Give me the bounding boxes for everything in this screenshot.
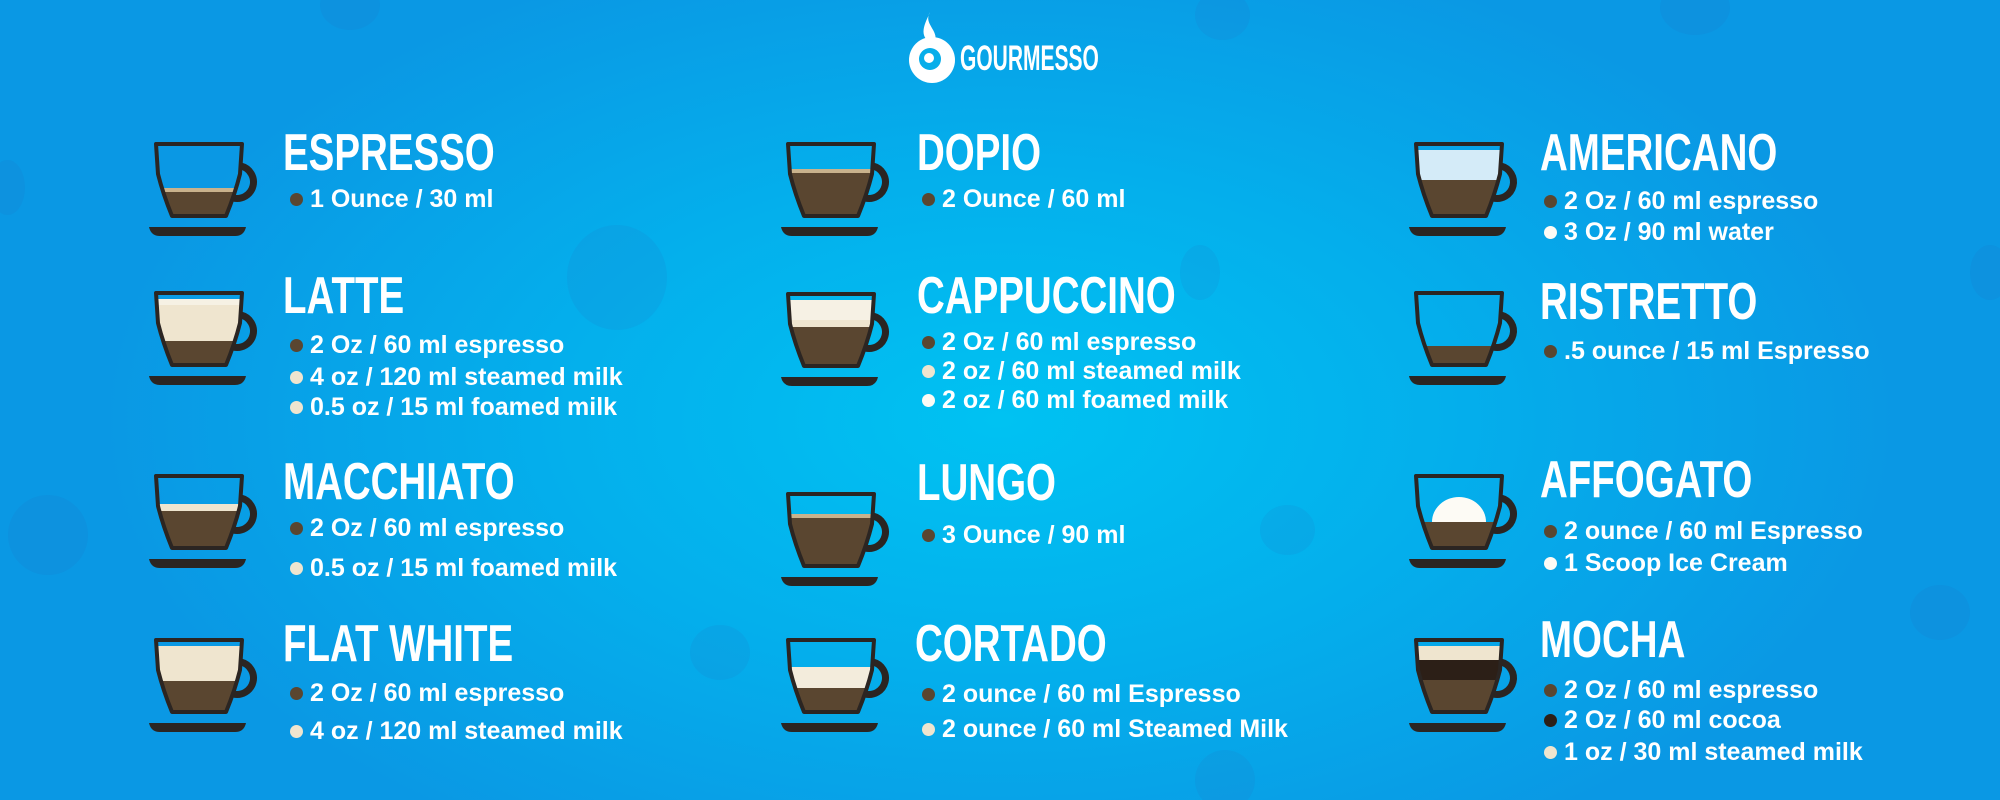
items	[290, 514, 617, 582]
icon: cortado cup	[781, 638, 890, 732]
items	[1544, 187, 1818, 246]
items	[1544, 676, 1863, 766]
title: LATTE	[283, 267, 404, 325]
items: 2 ounce / 60 ml Espresso	[942, 680, 1241, 708]
items: 2 ounce / 60 ml Steamed Milk	[942, 715, 1288, 743]
item: 2 Ounce / 60 ml	[942, 185, 1125, 213]
items: 2 ounce / 60 ml Espresso	[1564, 517, 1863, 545]
panel: latte	[149, 267, 623, 421]
items: 2 Oz / 60 ml espresso	[942, 328, 1196, 356]
icon: affogato cup	[1409, 474, 1518, 568]
items: 4 oz / 120 ml steamed milk	[310, 363, 623, 391]
icon: lungo cup	[781, 492, 890, 586]
title: DOPIO	[917, 124, 1041, 182]
panel: espresso	[149, 124, 495, 236]
items: 0.5 oz / 15 ml foamed milk	[310, 554, 617, 582]
items	[290, 679, 623, 745]
panel: lungo	[781, 454, 1125, 586]
panel: flat white	[149, 615, 623, 745]
panel: macchiato	[149, 453, 617, 582]
items	[1544, 517, 1863, 577]
icon: espresso cup	[149, 142, 258, 236]
icon: americano cup	[1409, 142, 1517, 236]
icon: mocha cup	[1409, 638, 1517, 732]
items: 3 Oz / 90 ml water	[1564, 218, 1774, 246]
title: LUNGO	[917, 454, 1056, 512]
item: 3 Ounce / 90 ml	[942, 521, 1125, 549]
title: MACCHIATO	[283, 453, 515, 511]
panel: cortado	[781, 615, 1288, 743]
items: 1 oz / 30 ml steamed milk	[1564, 738, 1863, 766]
items: 2 Oz / 60 ml cocoa	[1564, 706, 1781, 734]
items	[290, 331, 623, 421]
panel: affogato	[1409, 451, 1863, 577]
panel: mocha	[1409, 611, 1863, 766]
items: 4 oz / 120 ml steamed milk	[310, 717, 623, 745]
items: 2 Oz / 60 ml espresso	[1564, 187, 1818, 215]
title: RISTRETTO	[1540, 273, 1757, 331]
title: FLAT WHITE	[283, 615, 513, 673]
title: AMERICANO	[1540, 124, 1777, 182]
item: 1 Ounce / 30 ml	[310, 185, 493, 213]
background coffee beans	[150, 172, 1557, 694]
items	[922, 680, 1288, 743]
items: 2 oz / 60 ml foamed milk	[942, 386, 1228, 414]
icon: cappuccino cup	[781, 292, 890, 386]
items: 2 Oz / 60 ml espresso	[310, 679, 564, 707]
logo	[909, 12, 1099, 83]
icon: dopio cup	[781, 142, 890, 236]
items: 0.5 oz / 15 ml foamed milk	[310, 393, 617, 421]
items: 1 Scoop Ice Cream	[1564, 549, 1788, 577]
title: CAPPUCCINO	[917, 267, 1176, 325]
icon: latte cup	[149, 291, 258, 385]
icon: flame drop	[909, 12, 955, 83]
title: AFFOGATO	[1540, 451, 1752, 509]
icon: flat white cup	[149, 638, 258, 732]
icon: macchiato cup	[149, 474, 258, 568]
item: .5 ounce / 15 ml Espresso	[1564, 337, 1870, 365]
panel: dopio	[781, 124, 1125, 236]
panel: ristretto	[1409, 273, 1870, 385]
title: ESPRESSO	[283, 124, 495, 182]
items	[922, 328, 1241, 414]
title: MOCHA	[1540, 611, 1685, 669]
panel: americano	[1409, 124, 1818, 246]
items: 2 Oz / 60 ml espresso	[310, 331, 564, 359]
brand name: GOURMESSO	[960, 39, 1099, 78]
icon: ristretto cup	[1409, 291, 1517, 385]
items: 2 Oz / 60 ml espresso	[1564, 676, 1818, 704]
items: 2 oz / 60 ml steamed milk	[942, 357, 1241, 385]
items: 2 Oz / 60 ml espresso	[310, 514, 564, 542]
panel: cappuccino	[781, 267, 1241, 414]
title: CORTADO	[915, 615, 1107, 673]
